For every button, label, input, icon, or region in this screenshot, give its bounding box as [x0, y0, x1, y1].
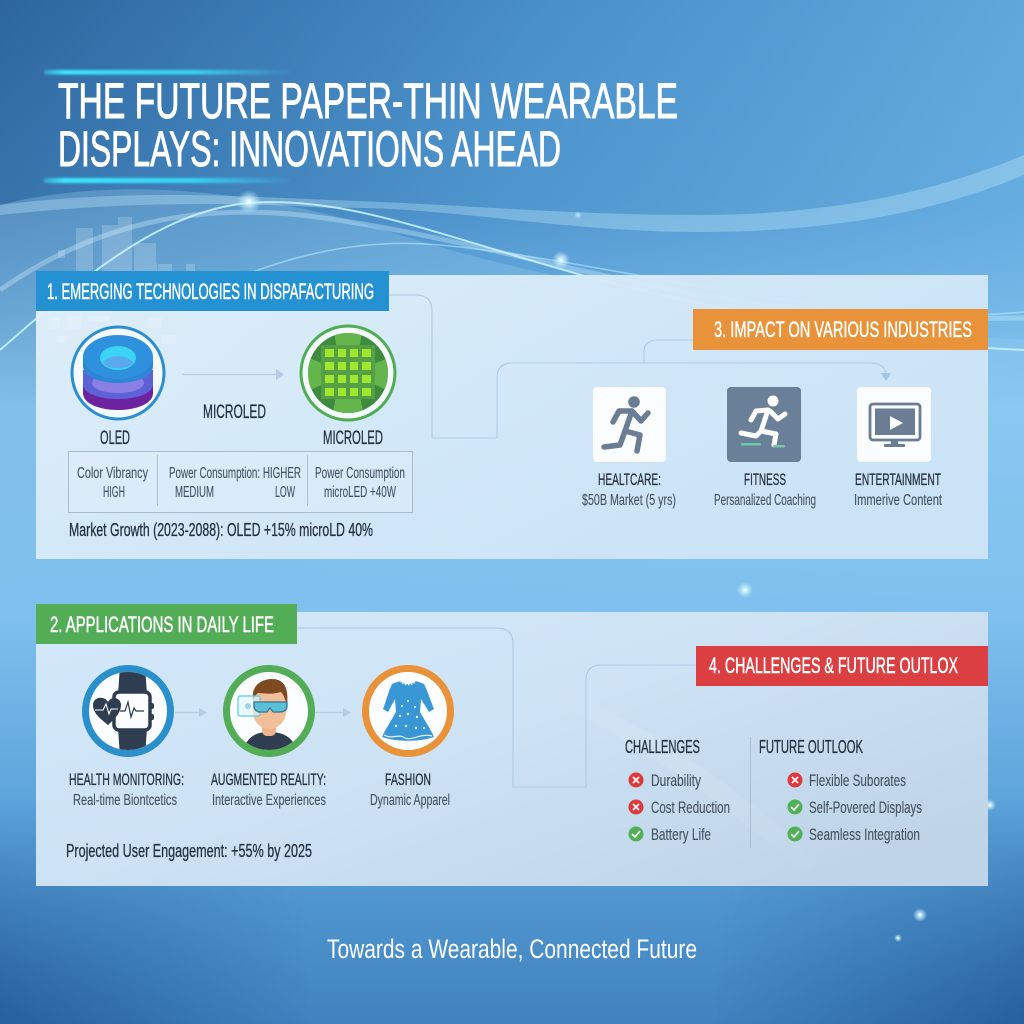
title: THE FUTURE PAPER-THIN WEARABLE: [58, 73, 678, 129]
header: section 1: 1. EMERGING TECHNOLOGIES IN DISPAFACTURING: [47, 279, 374, 304]
status: flexible substrates: Flexible Suborates: [809, 771, 906, 790]
comparison table: Color Vibrancy: [77, 465, 148, 482]
status: durability: Durability: [651, 771, 701, 790]
label: OLED: OLED: [100, 428, 130, 449]
status: self-powered displays: Self-Povered Displays: [809, 798, 922, 817]
comparison table: microLED +40W: [324, 484, 397, 501]
status: seamless integration: Seamless Integration: [809, 825, 920, 844]
panel: bottom row: [36, 604, 988, 886]
icon: smartwatch health: [86, 665, 170, 757]
label: healthcare: $50B Market (5 yrs): [582, 492, 676, 509]
status: self-powered displays: [788, 798, 922, 817]
market growth note: Market Growth (2023-2088): OLED +15% microLD 40%: [69, 520, 373, 540]
icon: entertainment screen: [857, 387, 931, 462]
label: fashion: [370, 770, 450, 809]
list: challenges: CHALLENGES: [625, 737, 700, 757]
label: augmented reality: Interactive Experiences: [212, 792, 326, 809]
header: section 2: [36, 604, 297, 644]
label: health monitoring: Real-time Biontcetics: [73, 792, 177, 809]
connector: section 1 to section 3: [389, 295, 886, 438]
arrow: health to AR: [175, 708, 207, 717]
label: fitness: [714, 470, 816, 509]
label: healthcare: [582, 470, 676, 509]
label: centre microLED: MICROLED: [203, 402, 266, 423]
icon: smart dress: [366, 668, 450, 754]
comparison table: Power Consumption: HIGHER: [169, 465, 301, 482]
panel: challenges and outlook: [625, 646, 988, 848]
footer tagline: Towards a Wearable, Connected Future: [327, 934, 697, 964]
label: entertainment: Immerive Content: [854, 492, 942, 509]
title: DISPLAYS: INNOVATIONS AHEAD: [58, 121, 561, 177]
connector: section 2 to section 4: [297, 628, 696, 787]
icon: microLED grid: [301, 326, 395, 420]
list: future outlook: FUTURE OUTLOOK: [759, 737, 863, 757]
header: section 2: 2. APPLICATIONS IN DAILY LIFE: [50, 612, 274, 637]
projected engagement note: Projected User Engagement: +55% by 2025: [66, 841, 312, 861]
list: future outlook: [759, 737, 922, 844]
comparison table: Power Consumption: [315, 465, 405, 482]
panel: applications in daily life: [36, 604, 450, 861]
label: health monitoring: [69, 770, 184, 809]
decorative glow bar top: [44, 70, 294, 74]
icon: fitness runner: [727, 387, 801, 462]
connector: branch to section 3 header: [644, 340, 693, 363]
comparison table: [68, 452, 412, 512]
header: section 4: [696, 646, 988, 686]
comparison table: HIGH: [103, 484, 125, 501]
arrow: AR to fashion: [315, 708, 351, 717]
icon: augmented reality person: [226, 668, 312, 754]
label: health monitoring: HEALTH MONITORING:: [69, 770, 184, 789]
label: fitness: FITNESS: [744, 470, 786, 489]
label: fashion: Dynamic Apparel: [370, 792, 450, 809]
icon: healthcare runner: [593, 387, 666, 462]
label: entertainment: [854, 470, 942, 509]
label: augmented reality: [211, 770, 326, 809]
label: microLED: MICROLED: [323, 428, 383, 449]
title: [58, 73, 678, 177]
status: flexible substrates: [788, 771, 906, 790]
panel: top row: [36, 271, 988, 559]
panel: emerging technologies: [36, 271, 412, 540]
decorative glow bar bottom: [44, 178, 294, 183]
header: section 3: [693, 309, 988, 350]
arrow: OLED to microLED: [182, 369, 284, 380]
label: healthcare: HEALTCARE:: [598, 470, 661, 489]
label: entertainment: ENTERTAINMENT: [855, 470, 941, 489]
list: challenges: [625, 737, 730, 844]
status: cost reduction: Cost Reduction: [651, 798, 730, 817]
status: seamless integration: [788, 825, 920, 844]
panel: impact on industries: [582, 309, 988, 509]
comparison table: MEDIUM: [175, 484, 214, 501]
label: augmented reality: AUGMENTED REALITY:: [211, 770, 326, 789]
header: section 1: [36, 271, 389, 311]
label: fitness: Persanalized Coaching: [714, 492, 816, 509]
status: battery life: Battery Life: [651, 825, 711, 844]
icon: OLED layers: [72, 327, 164, 419]
comparison table: LOW: [275, 484, 295, 501]
label: fashion: FASHION: [385, 770, 431, 789]
connector arrow head: [881, 373, 891, 381]
